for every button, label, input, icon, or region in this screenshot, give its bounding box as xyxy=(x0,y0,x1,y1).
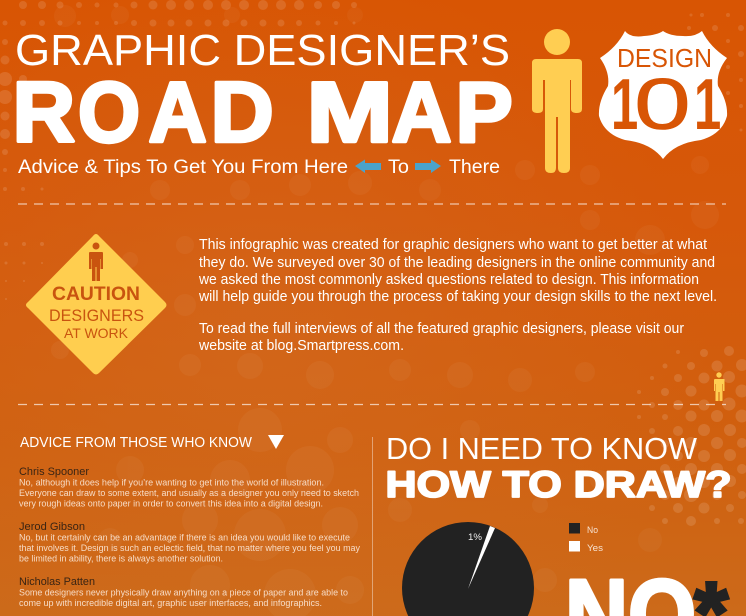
legend: Yes xyxy=(587,543,604,553)
advice: chris spooner: No, although it does help if you’re wanting to get into the world of illustration. xyxy=(19,478,324,488)
icon: design 101 highway shield: 0 xyxy=(634,64,691,144)
intro text: website at blog.Smartpress.com. xyxy=(198,337,404,354)
icon: design 101 highway shield xyxy=(599,31,727,159)
icon: caution sign xyxy=(26,234,166,374)
icon: right arrow xyxy=(415,160,441,173)
title: road map: D xyxy=(210,66,274,160)
title: road map: P xyxy=(456,66,513,160)
advice: jerod gibson xyxy=(19,521,360,564)
advice: jerod gibson: be limited in ability, there is always another solution. xyxy=(19,554,223,564)
icon: left arrow xyxy=(355,160,381,173)
title: road map: R xyxy=(12,65,75,160)
advice: chris spooner: very rough ideas onto paper in order to convert this idea into a digital design. xyxy=(19,498,323,508)
legend: No xyxy=(587,525,598,535)
pie chart: 1% xyxy=(468,532,482,542)
intro text xyxy=(198,236,717,354)
advice: jerod gibson: Jerod Gibson xyxy=(19,521,85,533)
intro text: To read the full interviews of all the featured graphic designers, please visit our xyxy=(199,320,684,337)
advice: chris spooner: Everyone can draw to some extent, and usually as a designer you only need to sketch xyxy=(19,488,359,498)
icon: design 101 highway shield: 1 xyxy=(611,65,638,145)
icon: caution sign: DESIGNERS xyxy=(49,306,144,325)
intro text: we asked the most commonly asked questions related to design. This information xyxy=(198,271,699,288)
title: road map: O xyxy=(78,65,140,160)
advice: jerod gibson: No, but it certainly can be an advantage if there is an idea you would like to execute xyxy=(19,532,350,542)
intro text: will help guide you through the process of taking your design skills to the next level. xyxy=(198,288,717,305)
heading: do i need to know: DO I NEED TO KNOW xyxy=(386,431,698,466)
icon: caution sign: AT WORK xyxy=(64,325,129,341)
icon: small person xyxy=(714,372,724,401)
subtitle with arrows: Advice & Tips To Get You From Here xyxy=(18,157,348,178)
subtitle with arrows: To xyxy=(388,157,409,178)
advice: nicholas patten: come up with incredible digital art, graphic user interfaces, and infographics. xyxy=(19,598,322,608)
legend xyxy=(569,523,604,553)
title: graphic designer's: GRAPHIC DESIGNER’S xyxy=(15,26,510,75)
advice: nicholas patten xyxy=(19,576,348,608)
icon: yellow person xyxy=(532,29,582,173)
title: road map: M xyxy=(306,65,393,160)
title: road map: A xyxy=(392,65,452,160)
advice: jerod gibson: that involves it. Design is such an eclectic field, that no matter where you feel you may xyxy=(19,543,360,553)
advice: chris spooner: Chris Spooner xyxy=(19,466,89,478)
advice heading: ADVICE FROM THOSE WHO KNOW xyxy=(20,434,253,451)
icon: down triangle xyxy=(268,435,284,449)
heading: how to draw: HOW TO DRAW? xyxy=(386,464,732,505)
pie chart xyxy=(402,522,534,616)
advice: chris spooner xyxy=(19,466,359,508)
intro text: they do. We surveyed over 30 of the leading designers in the online community and xyxy=(199,254,715,271)
icon: design 101 highway shield: 1 xyxy=(694,65,721,145)
advice: nicholas patten: Nicholas Patten xyxy=(19,576,95,588)
advice: nicholas patten: Some designers never physically draw anything on a piece of paper and are able to xyxy=(19,588,348,598)
icon: design 101 highway shield: DESIGN xyxy=(617,43,712,73)
icon: caution sign: CAUTION xyxy=(52,284,140,305)
subtitle with arrows xyxy=(18,157,500,178)
title: road map xyxy=(12,65,513,160)
title: road map: A xyxy=(148,65,207,160)
subtitle with arrows: There xyxy=(449,157,500,178)
intro text: This infographic was created for graphic designers who want to get better at what xyxy=(199,236,708,253)
